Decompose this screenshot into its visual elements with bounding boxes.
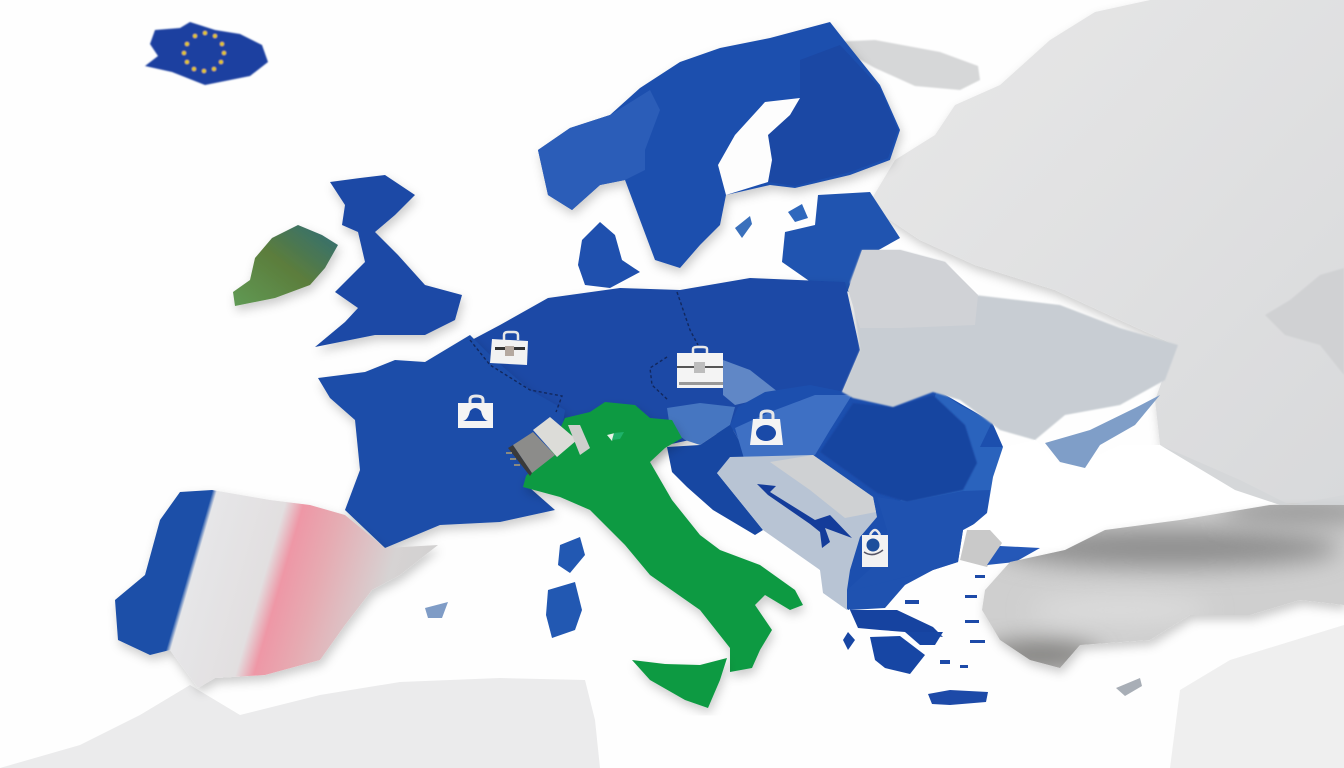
icon: bag with bell over Slovakia: [750, 411, 783, 445]
icon: bag with bell over France: [458, 396, 493, 428]
Aegean islands: [905, 575, 985, 668]
Croatia coast: [667, 425, 763, 535]
Turkey: [970, 495, 1344, 675]
Kola peninsula: [828, 40, 980, 90]
far east patch: [1265, 268, 1344, 375]
Italy: [523, 402, 803, 672]
Peloponnese: [843, 632, 943, 674]
Turkey north coast blue: [987, 546, 1040, 565]
Gulf of Bothnia: [718, 98, 800, 195]
Western Balkans gray: [717, 455, 877, 610]
Romania: [820, 395, 977, 502]
Sardinia: [546, 582, 582, 638]
Slovenia: [667, 403, 735, 445]
Greece north: [847, 570, 933, 610]
icon: briefcase over Germany west: [490, 332, 528, 365]
country border dashes: [470, 292, 698, 412]
Cyprus: [1116, 678, 1142, 696]
icon: bag with dial over Bulgaria: [862, 530, 888, 567]
Serbia dark marker: [757, 484, 852, 548]
icon: machine block over Italy border: [506, 417, 590, 476]
Belarus and Ukraine gray: [842, 250, 1178, 440]
Ireland: [233, 225, 338, 306]
Moldova and east coast: [900, 390, 1003, 513]
Georgia and Caucasus gray: [1160, 445, 1344, 505]
Estonian island: [788, 204, 808, 222]
Crete: [928, 690, 988, 705]
east landmass: Russia: [868, 0, 1344, 503]
Hungary band: [730, 385, 852, 430]
Eastern Europe blue underlay: [730, 390, 1003, 610]
EU flag map: [145, 22, 268, 85]
Denmark: [578, 222, 640, 288]
Greece mainland: [850, 610, 943, 637]
icon: briefcase over Czechia: [677, 347, 723, 388]
Spain and Portugal: [115, 490, 438, 688]
Middle East landmass: [1170, 625, 1344, 768]
Corsica: [558, 537, 585, 573]
Baltic states: [782, 192, 900, 292]
Africa: north coast: [0, 678, 600, 768]
Crimea blue: [1045, 395, 1160, 468]
Sicily: [632, 658, 727, 708]
white marker on Italy: [607, 432, 624, 441]
United Kingdom: [315, 175, 462, 347]
Bulgaria: [847, 490, 990, 610]
Slovakia and Hungary light: [735, 395, 852, 462]
Gotland island: [735, 216, 752, 238]
Scandinavia: [538, 22, 900, 268]
France: [318, 335, 565, 548]
Central Europe: Germany and Poland: [468, 278, 860, 470]
Austria light panel: [723, 360, 778, 405]
Belarus lighter top: [848, 250, 978, 328]
Istanbul Thrace gray: [960, 530, 1002, 567]
Finland shade: [768, 45, 898, 186]
flag stars: [182, 31, 226, 73]
Balearic islands: [425, 602, 448, 618]
Norway lighter shade: [538, 90, 660, 210]
Black Sea: [967, 440, 1285, 548]
